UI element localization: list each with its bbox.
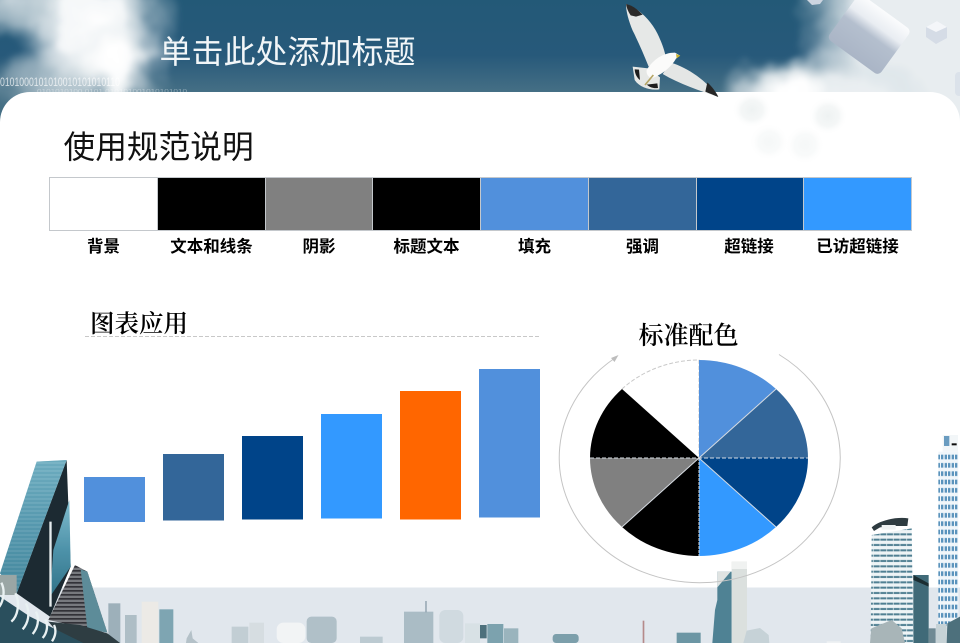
sector: hyperlink navy xyxy=(699,458,808,527)
color swatch strip xyxy=(50,178,912,230)
binary digits decoration xyxy=(0,75,187,95)
swatch labels: 已访超链接 xyxy=(816,236,899,256)
bar 5 xyxy=(400,391,461,520)
bar 3 xyxy=(242,436,303,520)
building: right white tower xyxy=(870,435,960,643)
swatch: title text xyxy=(372,178,480,230)
swatch: text and lines xyxy=(158,178,266,230)
sector: gray shadow xyxy=(590,458,699,527)
swatch labels: 填充 xyxy=(518,236,552,256)
sector: fill blue xyxy=(699,360,776,458)
swatch: visited hyperlink xyxy=(804,178,912,230)
sector: black lower xyxy=(622,458,699,556)
binary digits decoration: 0101000101010010101010110 xyxy=(0,75,120,89)
sector: visited bright blue xyxy=(699,458,776,556)
bar 2 xyxy=(163,454,224,520)
swatch labels: 文本和线条 xyxy=(170,236,253,256)
sector: black upper xyxy=(590,389,699,458)
title: 单击此处添加标题 xyxy=(160,34,416,70)
bar chart xyxy=(84,369,540,522)
skyline: central buildings xyxy=(480,562,841,643)
bar 4 xyxy=(321,414,382,518)
sector: white background xyxy=(622,360,699,458)
swatch labels: 超链接 xyxy=(724,236,774,256)
binary digits decoration: 0101010100 0101 010101001010101010 xyxy=(37,89,187,95)
heading: standard colors: 标准配色 xyxy=(638,322,739,350)
swatch: shadow xyxy=(266,178,372,230)
band: skyline background xyxy=(0,588,960,643)
swatch: hyperlink xyxy=(696,178,804,230)
heading: chart application: 图表应用 xyxy=(90,310,188,338)
swatch labels: 标题文本 xyxy=(394,236,460,256)
header background with clouds xyxy=(0,0,960,122)
skyline: small distant buildings xyxy=(108,601,480,643)
building: left glass tower xyxy=(0,460,120,643)
pie chart xyxy=(590,360,808,556)
icon: seagull xyxy=(626,4,718,97)
bar 6 xyxy=(479,369,540,518)
swatch: accent xyxy=(588,178,696,230)
icon: glass cubes xyxy=(807,0,960,96)
bar 1 xyxy=(84,477,145,522)
swatch labels: 阴影 xyxy=(302,237,336,256)
swatch labels xyxy=(87,236,899,256)
sector: accent blue xyxy=(699,389,808,458)
swatch: background xyxy=(50,178,158,230)
swatch labels: 强调 xyxy=(626,237,659,256)
arrow: ring around pie xyxy=(559,354,840,583)
faint flower watermark xyxy=(732,92,848,165)
heading: usage notes: 使用规范说明 xyxy=(64,129,254,165)
icon: curved bridge xyxy=(0,583,83,643)
swatch: fill xyxy=(480,178,588,230)
swatch labels: 背景 xyxy=(87,237,120,256)
